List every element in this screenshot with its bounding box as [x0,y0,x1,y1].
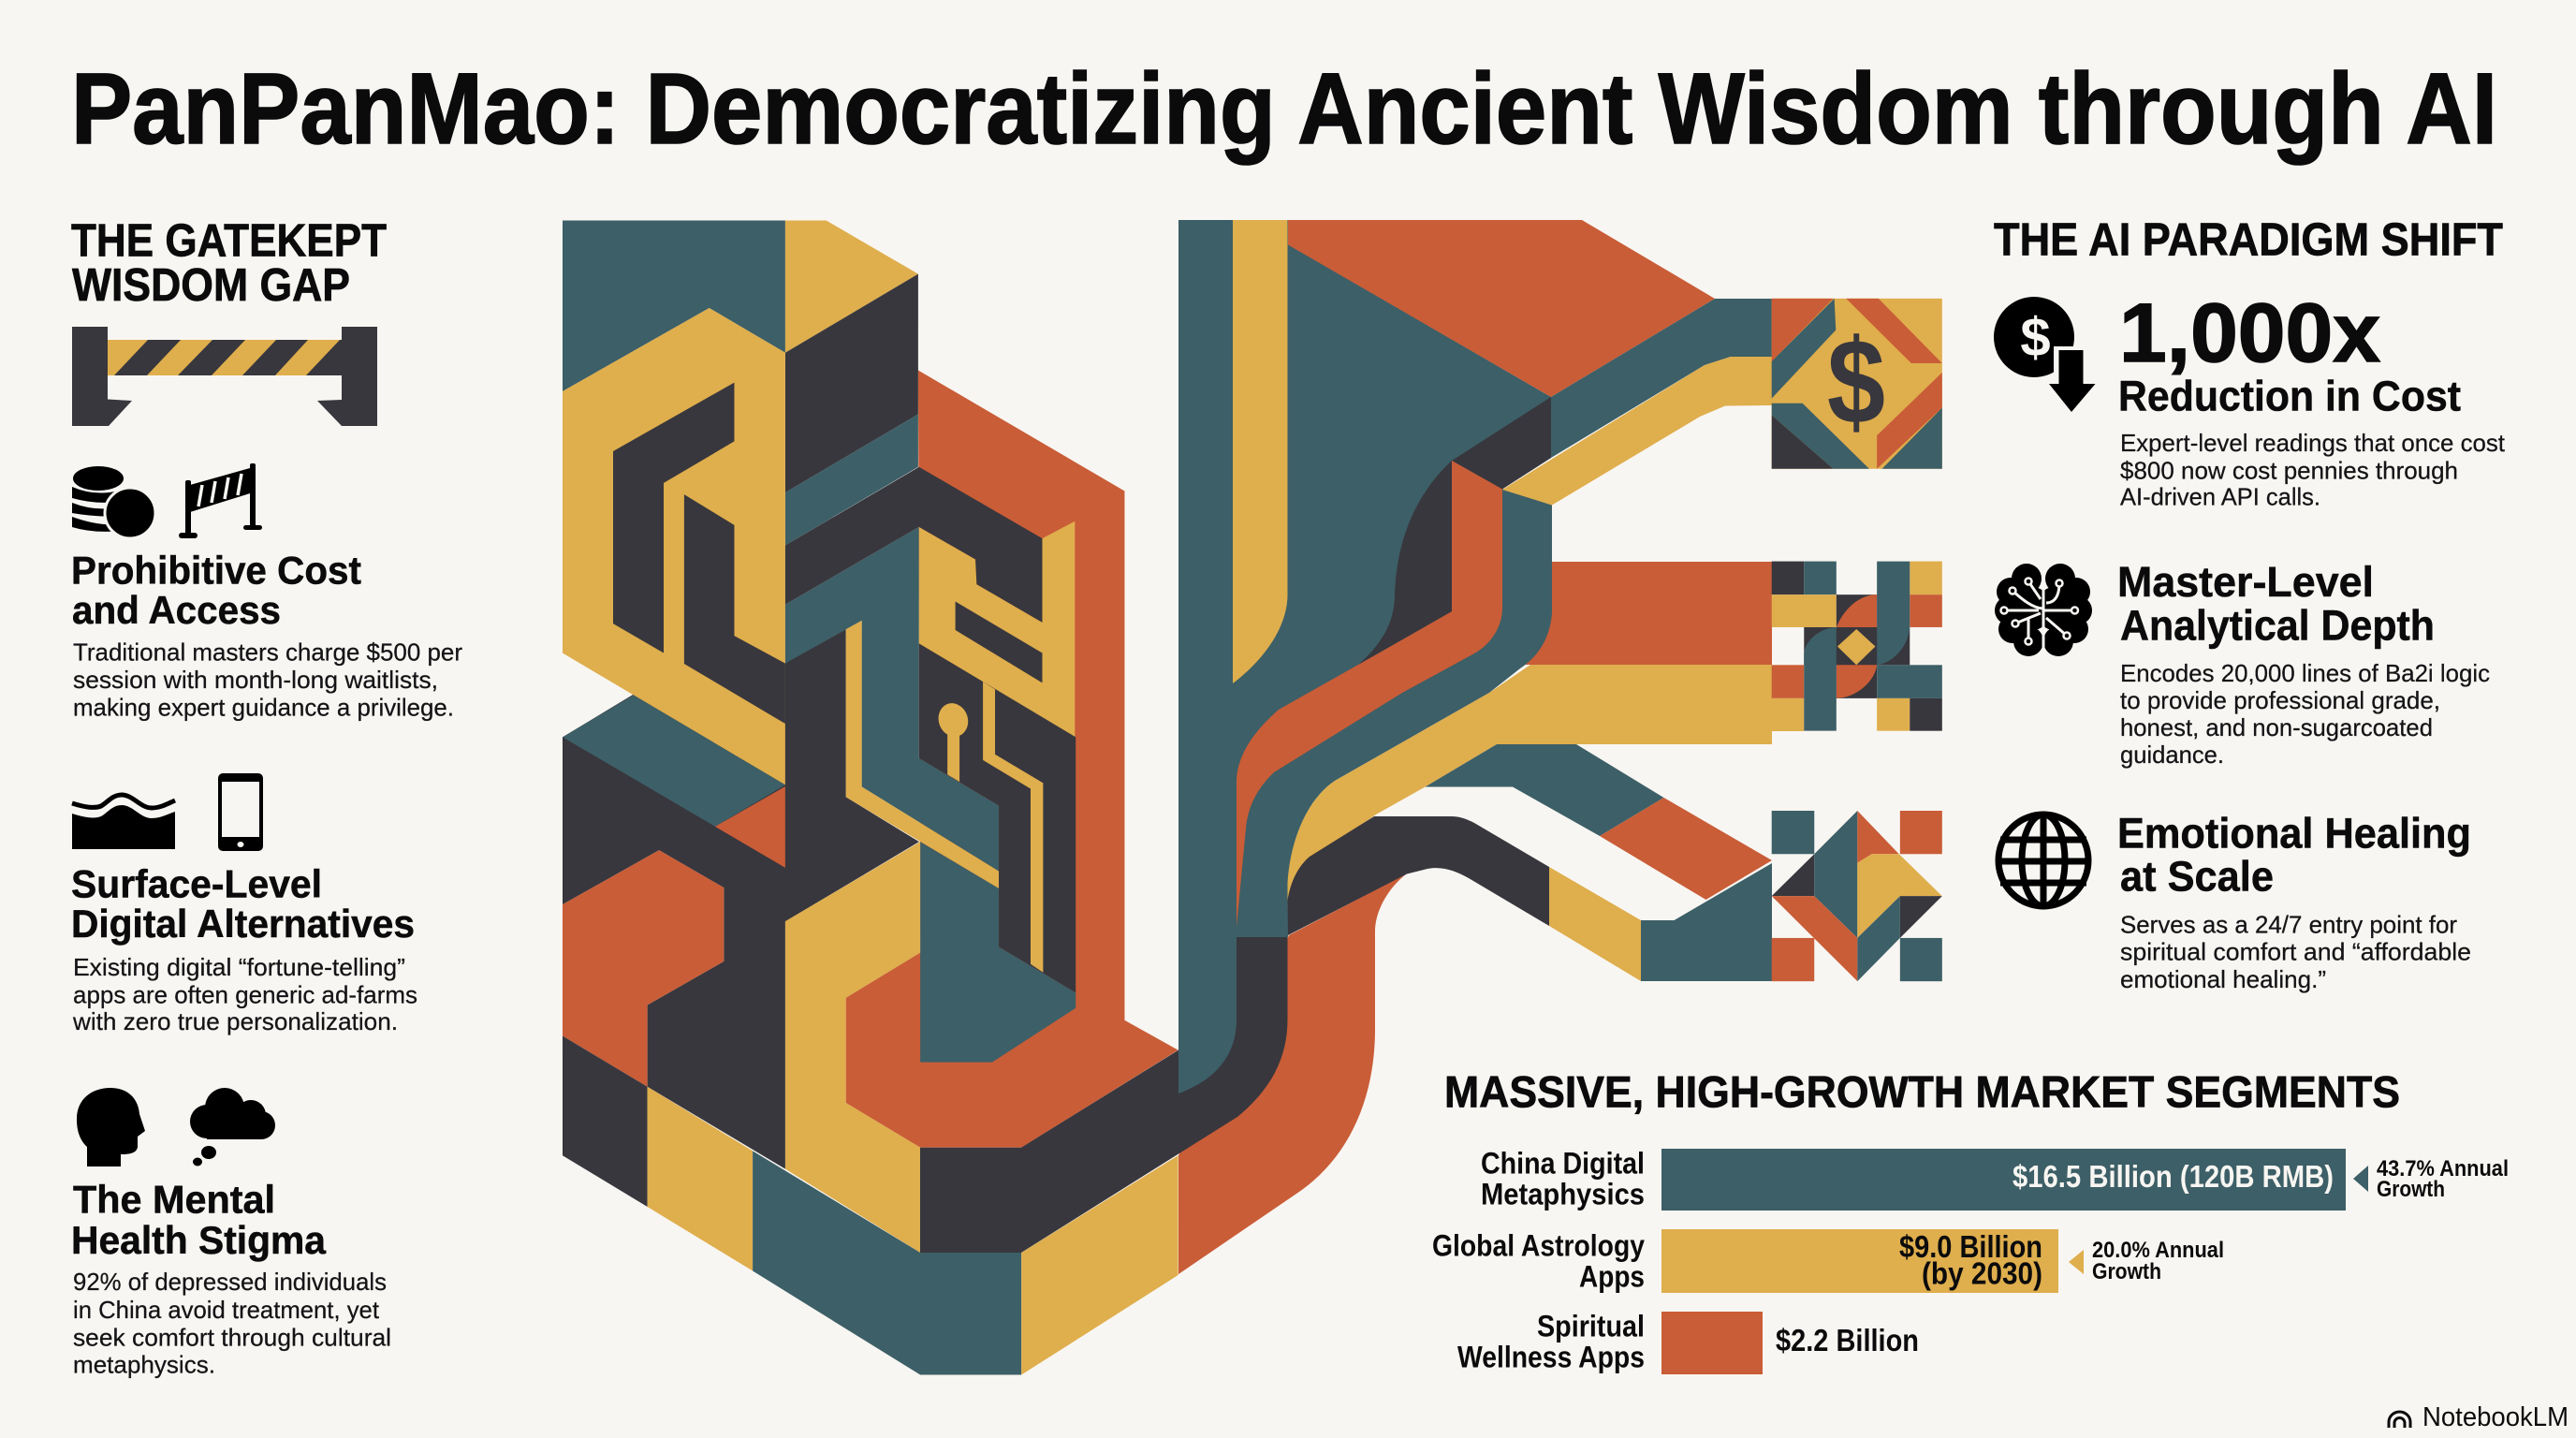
heading: market segments: MASSIVE, HIGH-GROWTH MARKET SEGMENTS [1444,1067,2400,1116]
block: surface-level alternatives [71,773,417,1035]
icon: barrier gate [72,327,377,426]
icon: dollar sign: $ [1827,315,1885,449]
heading: surface-level [71,861,415,946]
heading: prohibitive cost [71,549,361,632]
text: analytical body: to provide professional grade, [2120,686,2440,714]
text: cost body: AI-driven API calls. [2120,483,2320,511]
icon: thought cloud [190,1088,275,1167]
block: emotional healing [1998,809,2471,993]
text: surface-level body [72,953,417,1035]
icon: shallow wave [72,795,175,849]
heading: emotional healing at scale: Emotional Healing [2117,809,2471,858]
text: cost body [2120,429,2506,511]
text: mental health body: metaphysics. [73,1350,215,1378]
bar: China digital metaphysics: 43.7% Annual [2377,1156,2509,1181]
heading: AI paradigm shift: THE AI PARADIGM SHIFT [1994,215,2503,266]
heading: prohibitive cost: Prohibitive Cost [71,549,361,592]
bar: China digital metaphysics: $16.5 Billion (120B RMB) [2012,1159,2334,1194]
heading: mental health stigma: Health Stigma [71,1218,327,1262]
text: prohibitive cost body: making expert guidance a privilege. [73,693,454,721]
heading: emotional healing at scale: at Scale [2120,852,2274,901]
text: healing body: spiritual comfort and “affordable [2120,938,2471,966]
bar: global astrology apps: Global Astrology [1432,1228,1645,1262]
text: prohibitive cost body: Traditional masters charge $500 per [73,638,462,667]
heading: prohibitive cost: and Access [72,588,281,632]
bar: global astrology apps [1432,1228,2224,1294]
bar: spiritual wellness apps [1457,1309,1919,1374]
bar: global astrology apps: Growth [2092,1259,2161,1284]
bar: China digital metaphysics: Metaphysics [1481,1178,1645,1211]
panel: the AI paradigm shift [1994,215,2506,993]
heading: mental health stigma [71,1178,327,1262]
bar: China digital metaphysics: Growth [2377,1177,2445,1202]
bar: spiritual wellness apps: Spiritual [1537,1309,1645,1343]
text: analytical body: honest, and non-sugarcoated [2120,713,2433,741]
heading: emotional healing at scale [2117,809,2471,901]
icon: barricade [179,463,262,538]
icon: dollar coin with down arrow [1994,297,2102,418]
heading: master-level analytical depth: Master-Level [2117,558,2374,606]
icon: coin stack [72,466,155,538]
text: surface-level body: Existing digital “fortune-telling” [73,953,405,981]
text: analytical body [2120,659,2490,769]
bar chart [1432,1146,2509,1374]
text: mental health body [73,1268,391,1378]
text: mental health body: 92% of depressed individuals [73,1268,387,1296]
bar: global astrology apps: 20.0% Annual [2092,1238,2224,1263]
panel: the gatekept wisdom gap [71,215,462,1378]
logo: NotebookLM watermark: NotebookLM [2422,1402,2569,1432]
bar: global astrology apps: $9.0 Billion [1899,1229,2042,1264]
text: cost body: $800 now cost pennies through [2120,457,2458,485]
heading: master-level analytical depth: Analytical Depth [2120,601,2435,650]
heading: mental health stigma: The Mental [73,1178,275,1221]
text: prohibitive cost body [73,638,462,721]
icon: dollar coin with down arrow: $ [2020,307,2051,368]
text: healing body: Serves as a 24/7 entry point for [2120,910,2457,938]
bar: China digital metaphysics [1481,1146,2509,1211]
block: prohibitive cost [71,463,462,721]
text: analytical body: Encodes 20,000 lines of Ba2i logic [2120,659,2490,687]
icon tile: dollar mosaic [1772,299,1942,469]
icon: head silhouette [77,1088,145,1167]
icon tile: diamond mosaic [1772,811,1942,981]
heading: gatekept wisdom gap [71,215,387,311]
illustration: isometric maze block [563,221,1178,1375]
heading: gatekept wisdom gap: WISDOM GAP [72,260,350,311]
text: prohibitive cost body: session with month-long waitlists, [73,666,438,694]
bar: global astrology apps: Apps [1579,1260,1645,1294]
text: mental health body: seek comfort through cultural [73,1324,391,1352]
text: cost body: Expert-level readings that once cost [2120,429,2506,457]
block: analytical depth [1995,558,2490,769]
bar: global astrology apps: (by 2030) [1922,1256,2042,1290]
icon tile: knot mosaic [1772,562,1942,731]
heading: surface-level: Surface-Level [71,861,322,906]
block: mental health stigma [71,1088,391,1378]
text: surface-level body: with zero true personalization. [72,1007,398,1035]
panel: market segments [1432,1067,2509,1374]
icon: smartphone [218,773,263,851]
text: healing body: emotional healing.” [2120,965,2326,993]
bar: spiritual wellness apps: Wellness Apps [1457,1341,1645,1374]
text: mental health body: in China avoid treatment, yet [73,1296,380,1324]
icon: circuit brain [1995,562,2092,660]
text: surface-level body: apps are often generic ad-farms [73,981,417,1009]
text: analytical body: guidance. [2120,741,2224,769]
text: healing body [2120,910,2471,993]
heading: surface-level: Digital Alternatives [71,902,415,946]
bar: spiritual wellness apps: $2.2 Billion [1776,1323,1919,1357]
heading: reduction in cost: Reduction in Cost [2118,373,2461,419]
heading: master-level analytical depth [2117,558,2435,650]
bar: China digital metaphysics: China Digital [1481,1146,1645,1180]
stat: 1,000x: 1,000x [2119,286,2380,379]
illustration: flowing pipes [920,220,1804,1274]
icon: globe [1998,814,2088,906]
heading: gatekept wisdom gap: THE GATEKEPT [71,215,387,266]
block: cost reduction [1994,286,2506,511]
